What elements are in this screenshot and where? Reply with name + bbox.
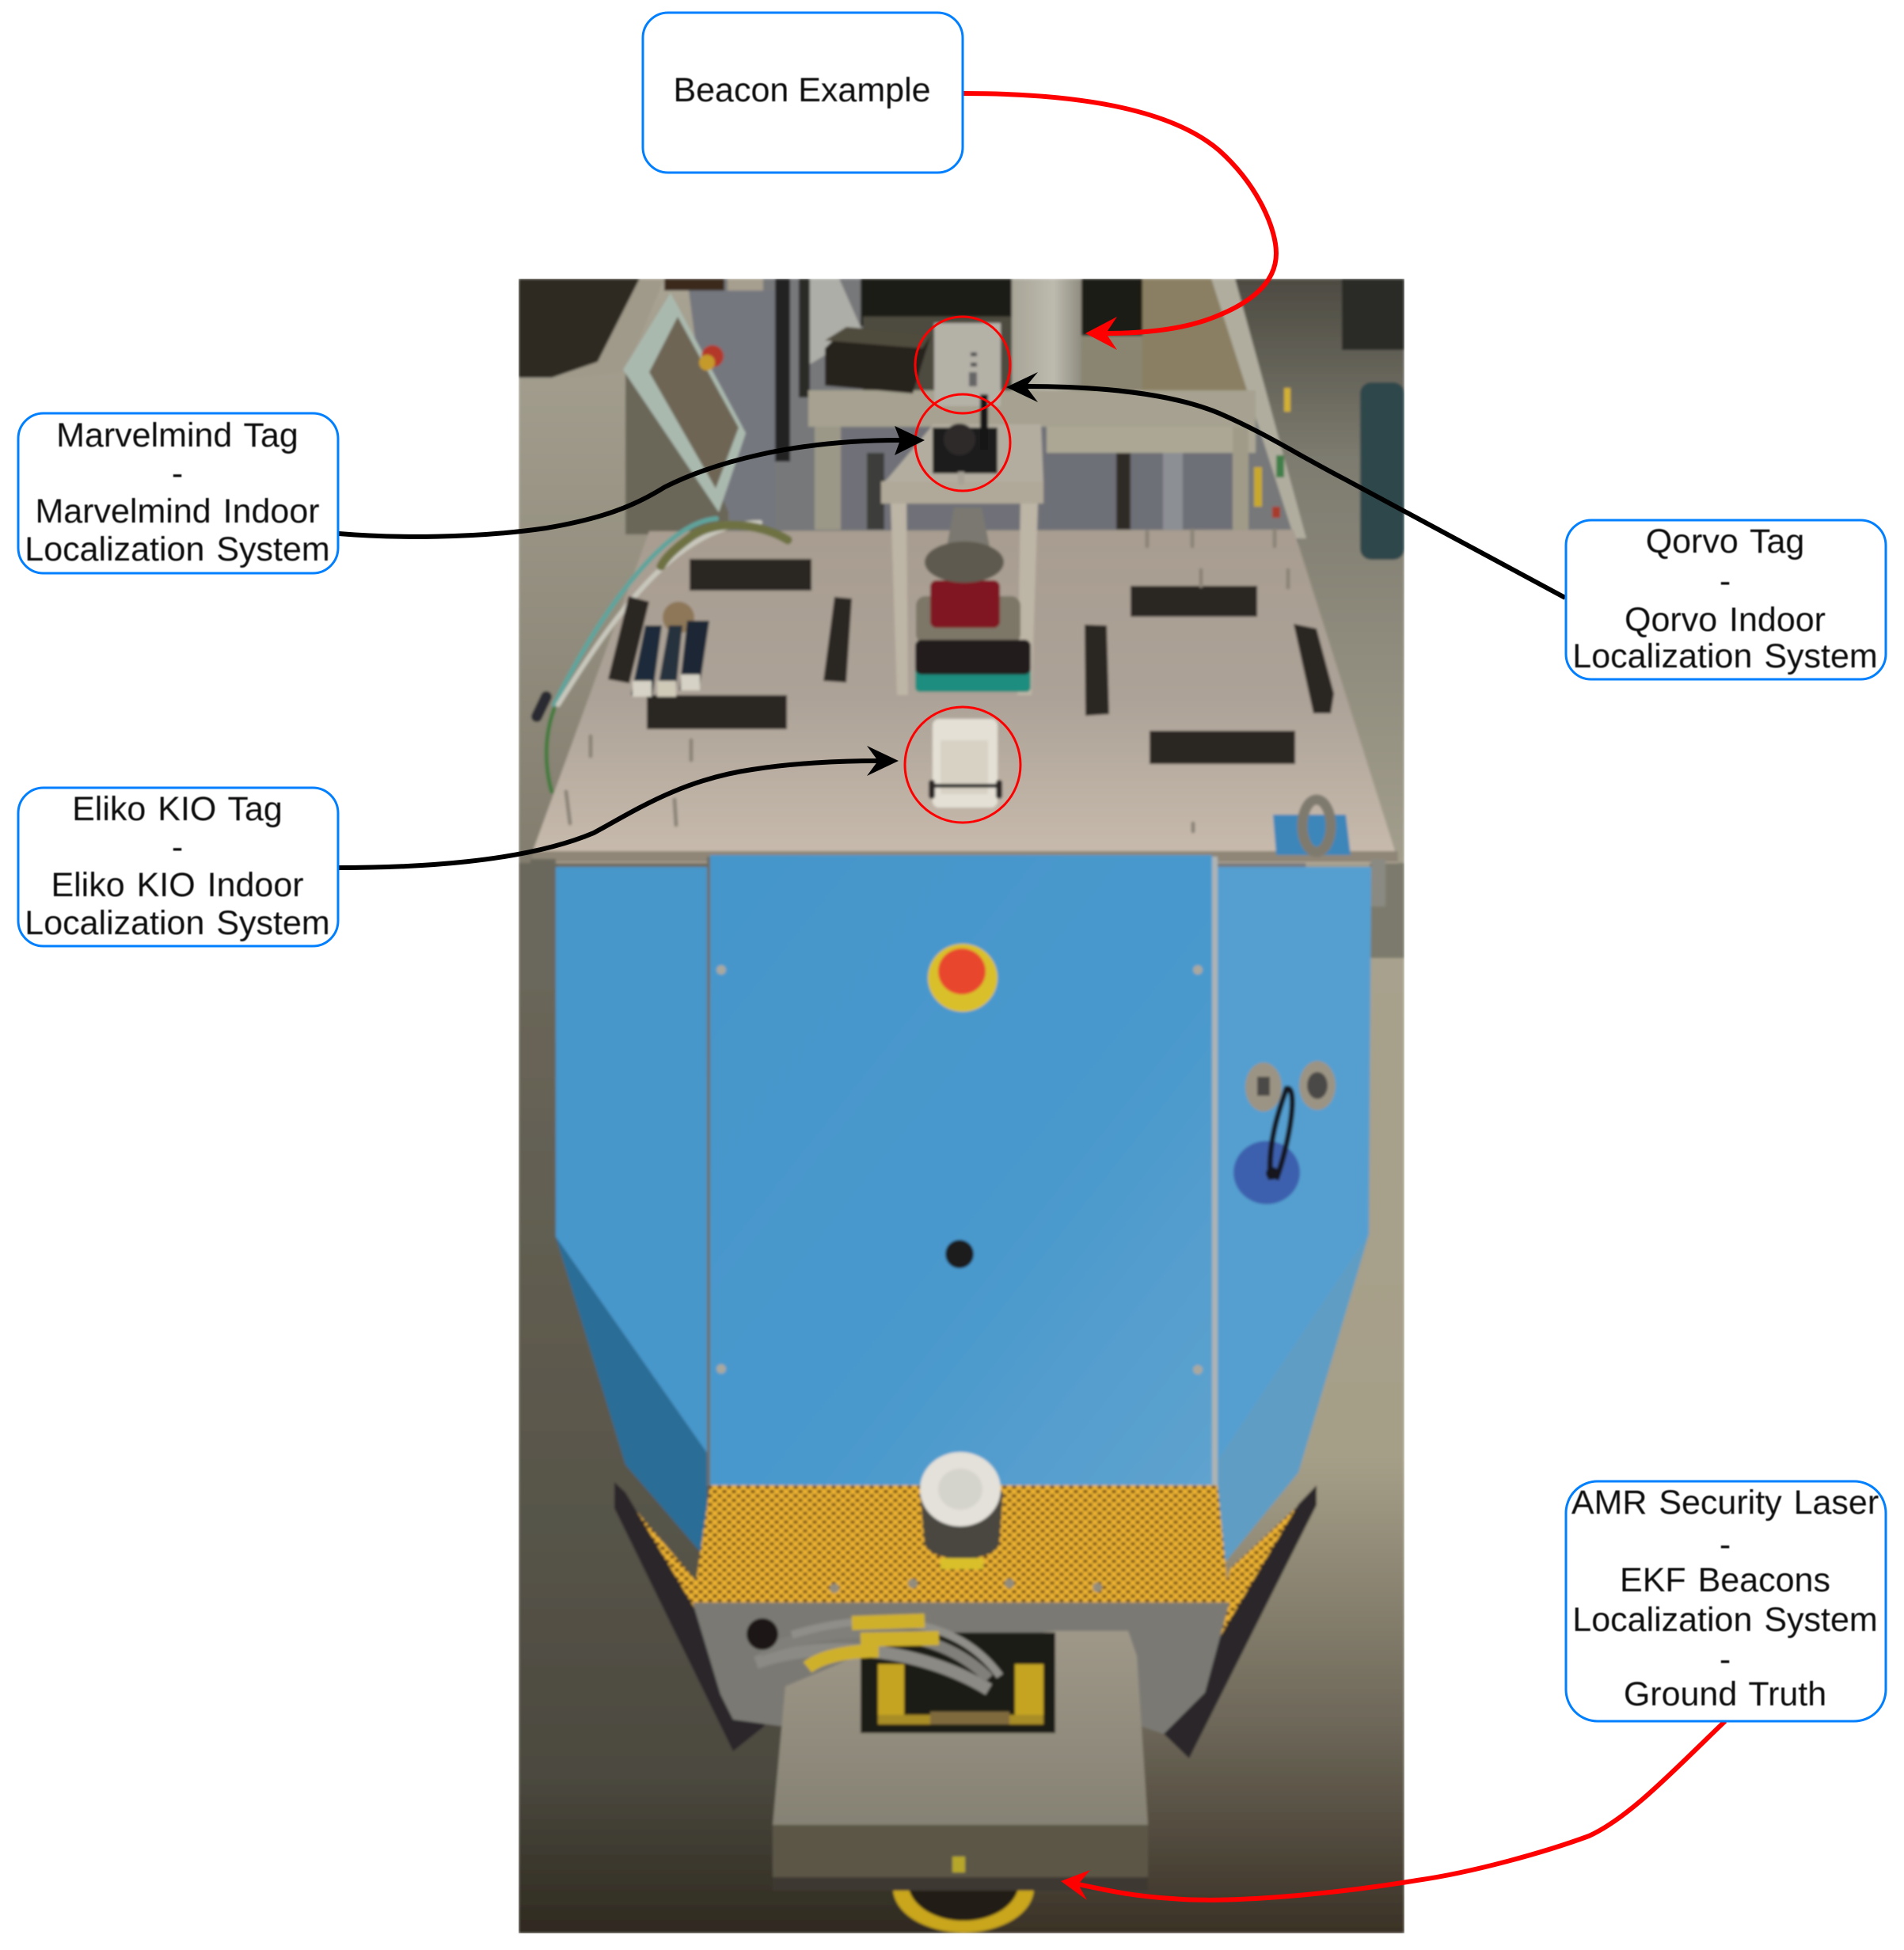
callout: qorvo tag (1566, 520, 1886, 679)
callout: AMR security laser: AMR Security Laser (1571, 1484, 1879, 1522)
red highlight: beacon (915, 317, 1010, 413)
callout: beacon example: Beacon Example (673, 71, 931, 109)
callout: AMR security laser: - (1720, 1526, 1731, 1564)
callout: marvelmind tag: Marvelmind Indoor (35, 492, 320, 530)
guard screws (830, 1579, 1102, 1593)
emergency stop button (928, 944, 998, 1012)
marvelmind tag on tower (933, 394, 998, 485)
red highlight: eliko tag (905, 707, 1020, 823)
black knob (945, 1240, 974, 1268)
callout: AMR security laser: Ground Truth (1624, 1675, 1826, 1713)
arrow: eliko tag (339, 746, 899, 868)
arrow: security laser (1061, 1721, 1725, 1900)
beacon unit and neighbouring black box (825, 323, 1001, 406)
cables (537, 519, 788, 792)
orange perforated guard (693, 1485, 1229, 1602)
callout: marvelmind tag (18, 413, 338, 573)
arrow: qorvo tag (1006, 372, 1565, 598)
drive well with yellow frame (861, 1633, 1055, 1733)
callout: marvelmind tag: - (172, 454, 183, 492)
shackle hook (1273, 800, 1351, 855)
callout: marvelmind tag: Marvelmind Tag (56, 416, 298, 454)
bolts on plate (566, 530, 1288, 831)
callout: AMR security laser: Localization System (1572, 1601, 1878, 1639)
callout: eliko kio tag: Localization System (25, 904, 330, 942)
callout: qorvo tag: Qorvo Tag (1646, 523, 1804, 561)
callout: qorvo tag: - (1720, 562, 1731, 600)
control screen (623, 293, 746, 512)
background: laboratory (519, 279, 1404, 912)
top mounting plate (532, 530, 1398, 863)
callout: AMR security laser: - (1720, 1640, 1731, 1678)
arrow: marvelmind tag (339, 426, 925, 537)
red rotating lidar (915, 507, 1031, 692)
callout: eliko kio tag: Eliko KIO Tag (72, 790, 283, 828)
front safety laser scanner (891, 1888, 1036, 1933)
white eliko tag (929, 719, 1002, 808)
orange side mesh (636, 1507, 1297, 1636)
robot photograph (519, 279, 1404, 1933)
sensor tower frame (881, 424, 1043, 695)
blue chassis panels (530, 855, 1385, 1572)
black foam bars (608, 559, 1334, 764)
side connectors (1233, 1061, 1336, 1204)
grey drive housing (773, 1631, 1148, 1891)
red highlight: marvelmind tag (915, 394, 1010, 491)
batteries (631, 602, 709, 697)
galvanized rear plate (693, 1602, 1229, 1734)
callout: marvelmind tag: Localization System (25, 530, 330, 568)
callout: AMR security laser (1566, 1481, 1886, 1721)
black bumpers (614, 1482, 1317, 1758)
callout: qorvo tag: Qorvo Indoor (1625, 601, 1826, 639)
callout: qorvo tag: Localization System (1572, 637, 1878, 675)
grey cables and yellow labels (747, 1618, 1000, 1690)
rear laser head (920, 1452, 1003, 1569)
panel screws (716, 965, 1203, 1374)
arrow: beacon example to beacon (963, 93, 1276, 350)
left and right floor (519, 863, 1404, 1933)
callout: beacon example (643, 13, 963, 173)
callout: AMR security laser: EKF Beacons (1620, 1561, 1830, 1599)
callout: eliko kio tag: - (172, 828, 183, 866)
callout: eliko kio tag: Eliko KIO Indoor (51, 866, 304, 904)
callout: eliko kio tag (18, 788, 338, 946)
